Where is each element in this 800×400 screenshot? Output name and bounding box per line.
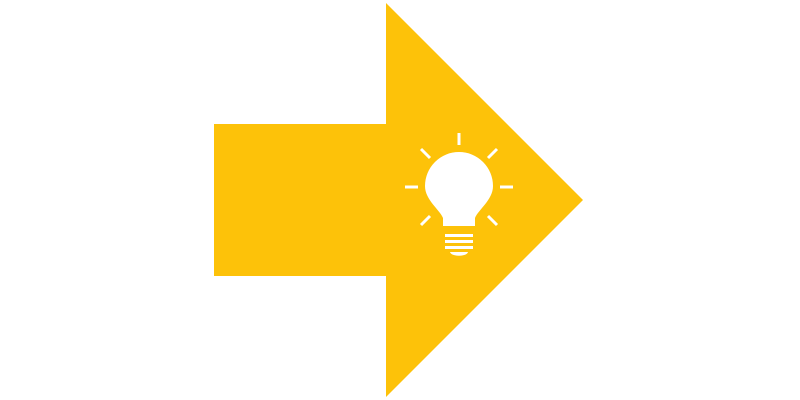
bulb glass: [425, 152, 493, 226]
bulb rays: [405, 133, 513, 225]
icon: light bulb: [405, 133, 513, 256]
bulb base: [445, 234, 473, 256]
arrow: yellow right arrow: [214, 3, 583, 397]
